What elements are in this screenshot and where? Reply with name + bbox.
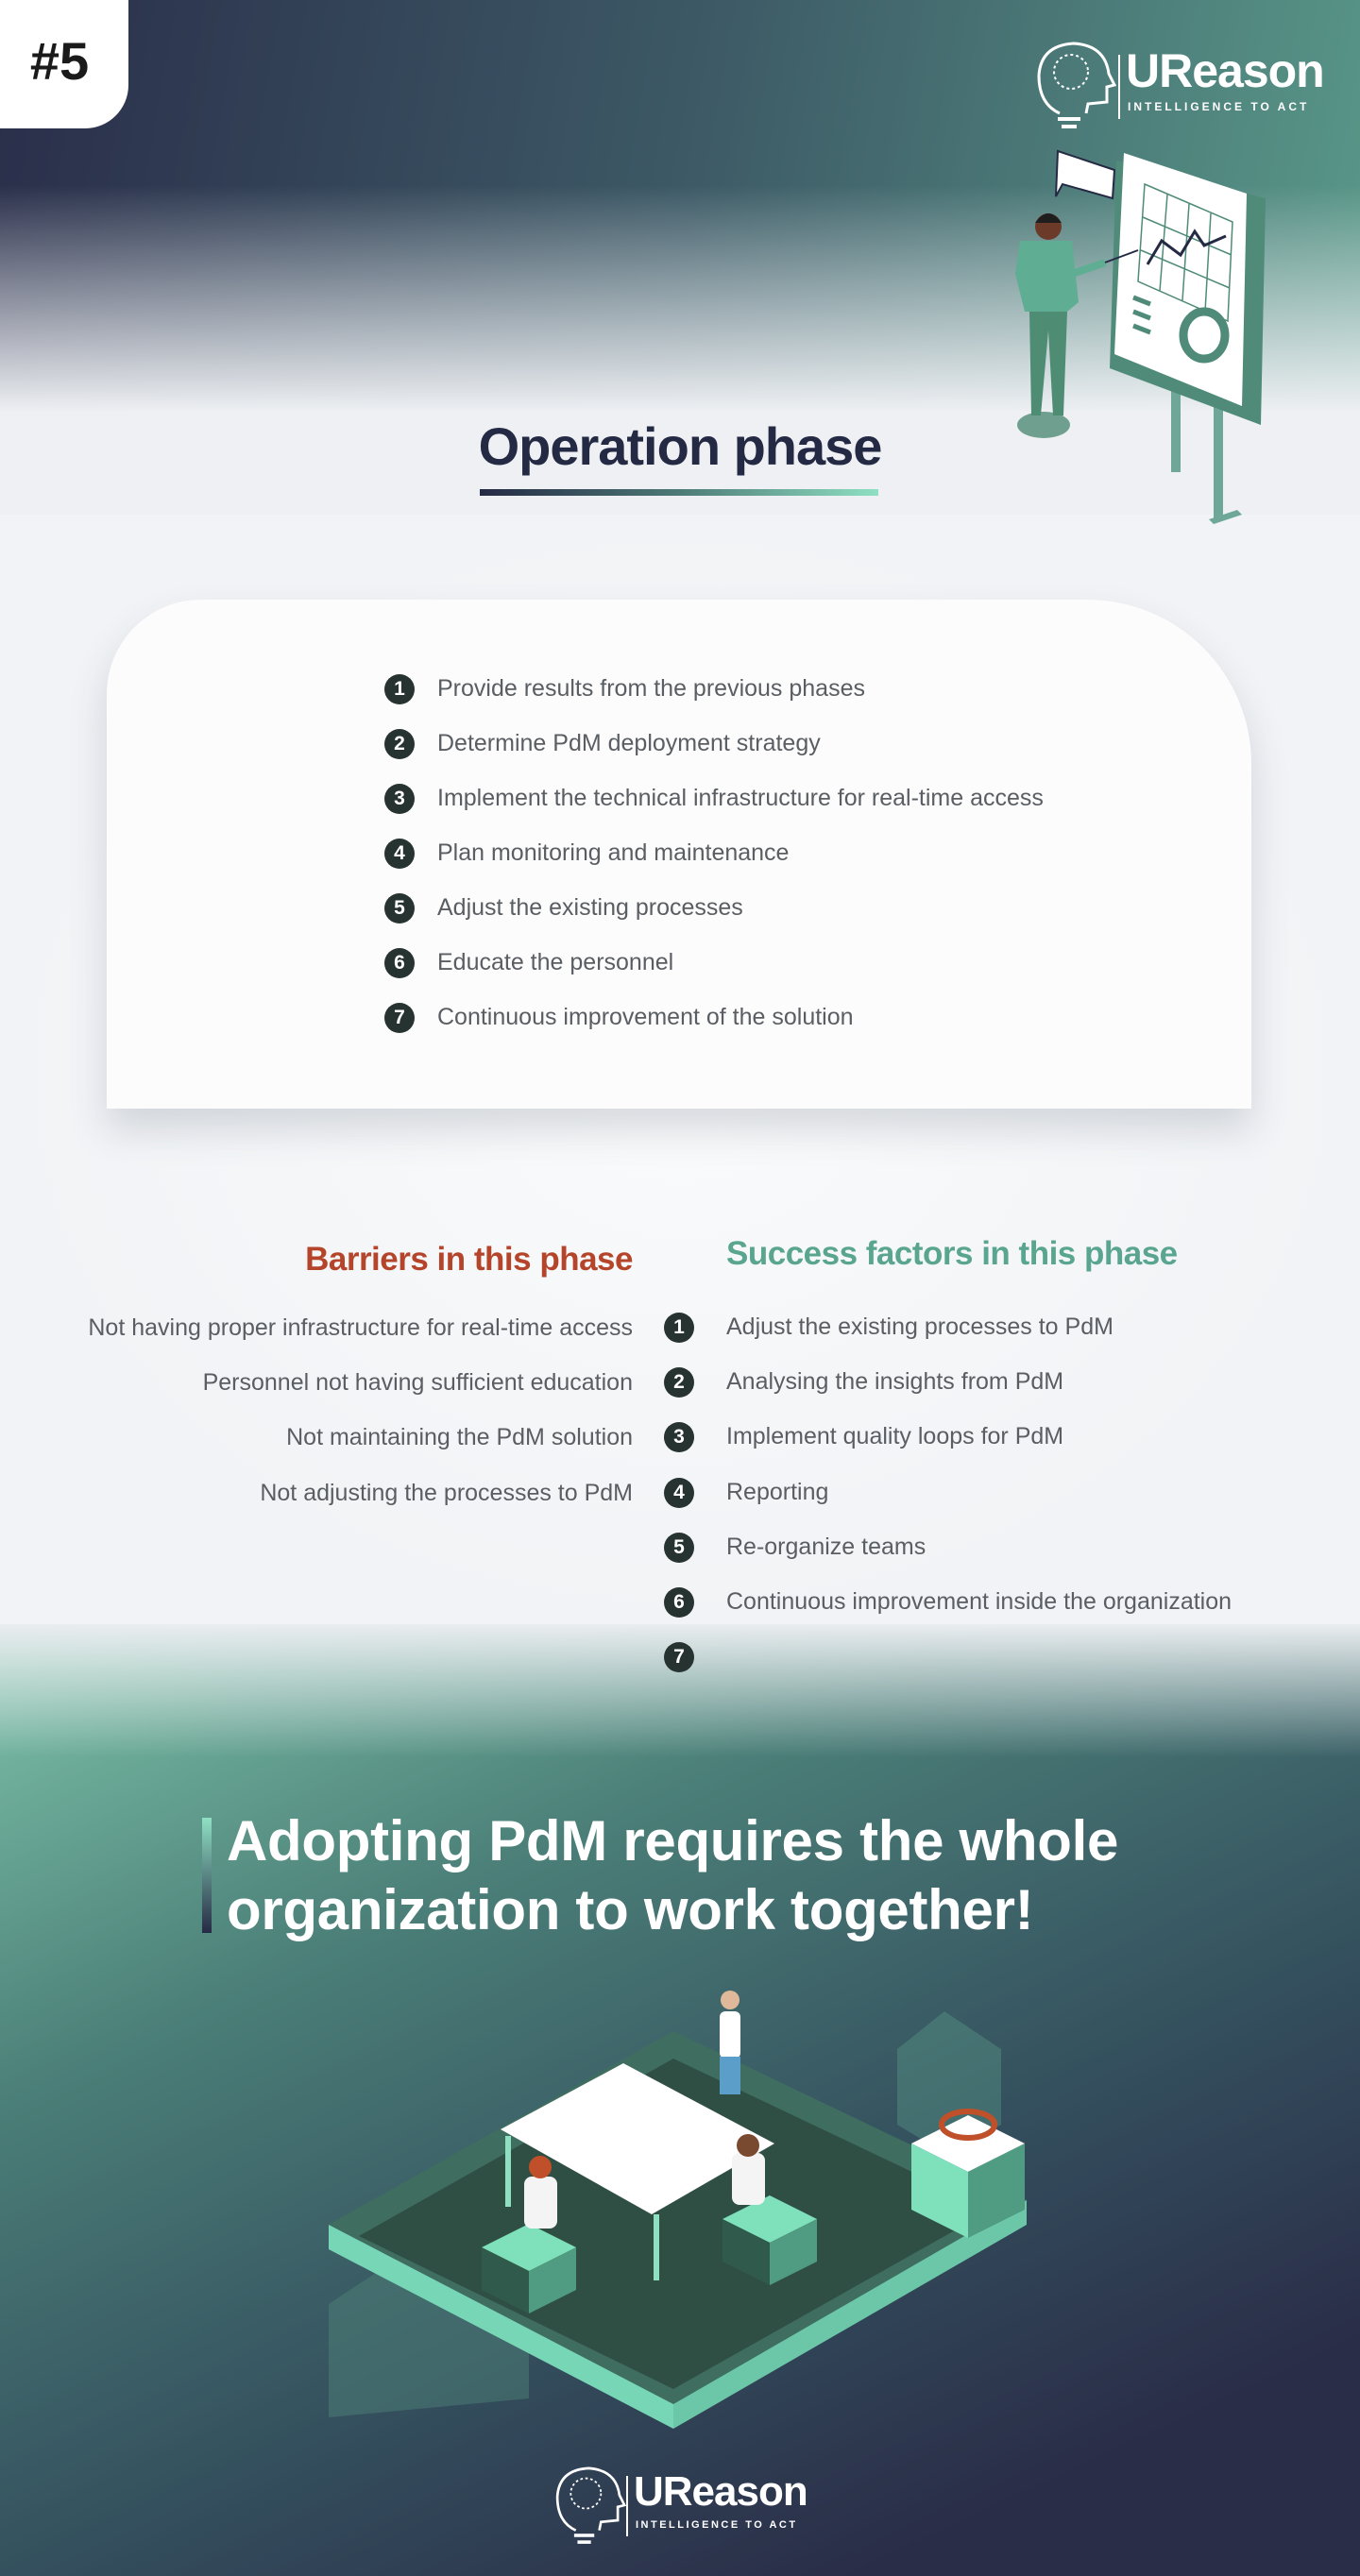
accent bar: [202, 1818, 212, 1933]
step 6: [384, 948, 673, 978]
list: success factors: Implement quality loops for PdM: [726, 1423, 1063, 1449]
list: success factors: 5: [673, 1536, 685, 1558]
panel: steps card: 7: [394, 1007, 405, 1028]
bottom background gradient: [0, 1624, 1360, 2576]
badge: #5: [0, 0, 128, 128]
panel: steps card: [107, 600, 1251, 1109]
panel: steps card: Continuous improvement of the solution: [437, 1004, 854, 1030]
panel: steps card: 5: [394, 897, 405, 919]
logo top: UReason: [1126, 44, 1324, 97]
list: success factors: 4: [673, 1482, 685, 1503]
step 3: [384, 784, 1044, 814]
panel: steps card: Provide results from the previous phases: [437, 675, 865, 702]
list: success factors: [664, 1313, 1232, 1672]
step 1: [384, 674, 865, 704]
step 2: [384, 729, 821, 759]
middle background: [0, 515, 1360, 1629]
callout: conclusion heading: Adopting PdM requires the whole: [227, 1809, 1118, 1873]
panel: steps card: Plan monitoring and maintenance: [437, 839, 789, 866]
list: success factors: 7: [673, 1646, 685, 1668]
title underline: [480, 489, 878, 496]
logo bottom: INTELLIGENCE TO ACT: [636, 2519, 798, 2531]
panel: steps card: 2: [394, 733, 405, 754]
list: success factors: Re-organize teams: [726, 1534, 926, 1560]
top background gradient: [0, 0, 1360, 529]
list: barriers: Not maintaining the PdM solution: [286, 1424, 633, 1450]
illustration: team meeting on platform: [329, 1991, 1027, 2429]
list: success factors: Reporting: [726, 1479, 828, 1505]
list: success factors: Analysing the insights from PdM: [726, 1368, 1063, 1395]
title: Operation phase: Operation phase: [479, 416, 881, 476]
panel: steps card: Educate the personnel: [437, 949, 673, 975]
logo bottom: [555, 2466, 808, 2544]
heading: barriers: Barriers in this phase: [305, 1241, 633, 1278]
list: success factors: 6: [673, 1591, 685, 1613]
list: success factors: 3: [673, 1426, 685, 1448]
list: barriers: [88, 1314, 633, 1506]
panel: steps card: 3: [394, 788, 405, 809]
list: success factors: 1: [673, 1316, 685, 1338]
logo top: INTELLIGENCE TO ACT: [1128, 100, 1309, 113]
list: barriers: Not having proper infrastructure for real-time access: [88, 1314, 633, 1341]
step 4: [384, 839, 789, 869]
list: success factors: Continuous improvement inside the organization: [726, 1588, 1232, 1615]
panel: steps card: 4: [394, 842, 405, 864]
step 5: [384, 893, 743, 924]
panel: steps card: Implement the technical infrastructure for real-time access: [437, 785, 1044, 811]
illustration: presenter with board: [1015, 149, 1266, 524]
panel: steps card: 6: [394, 952, 405, 974]
list: success factors: Adjust the existing processes to PdM: [726, 1313, 1114, 1340]
badge: #5: #5: [30, 31, 89, 91]
list: success factors: 2: [673, 1371, 685, 1393]
list: barriers: Not adjusting the processes to PdM: [260, 1480, 633, 1506]
logo bottom: UReason: [634, 2468, 808, 2515]
panel: steps card: 1: [394, 678, 405, 700]
panel: steps card: Adjust the existing processes: [437, 894, 743, 921]
logo top: [1037, 42, 1324, 128]
step 7: [384, 1003, 854, 1033]
callout: conclusion heading: organization to work together!: [227, 1878, 1033, 1941]
panel: steps card: Determine PdM deployment strategy: [437, 730, 821, 756]
heading: success factors: Success factors in this phase: [726, 1235, 1178, 1272]
list: barriers: Personnel not having sufficient education: [203, 1369, 633, 1396]
callout: conclusion heading: [202, 1809, 1118, 1941]
